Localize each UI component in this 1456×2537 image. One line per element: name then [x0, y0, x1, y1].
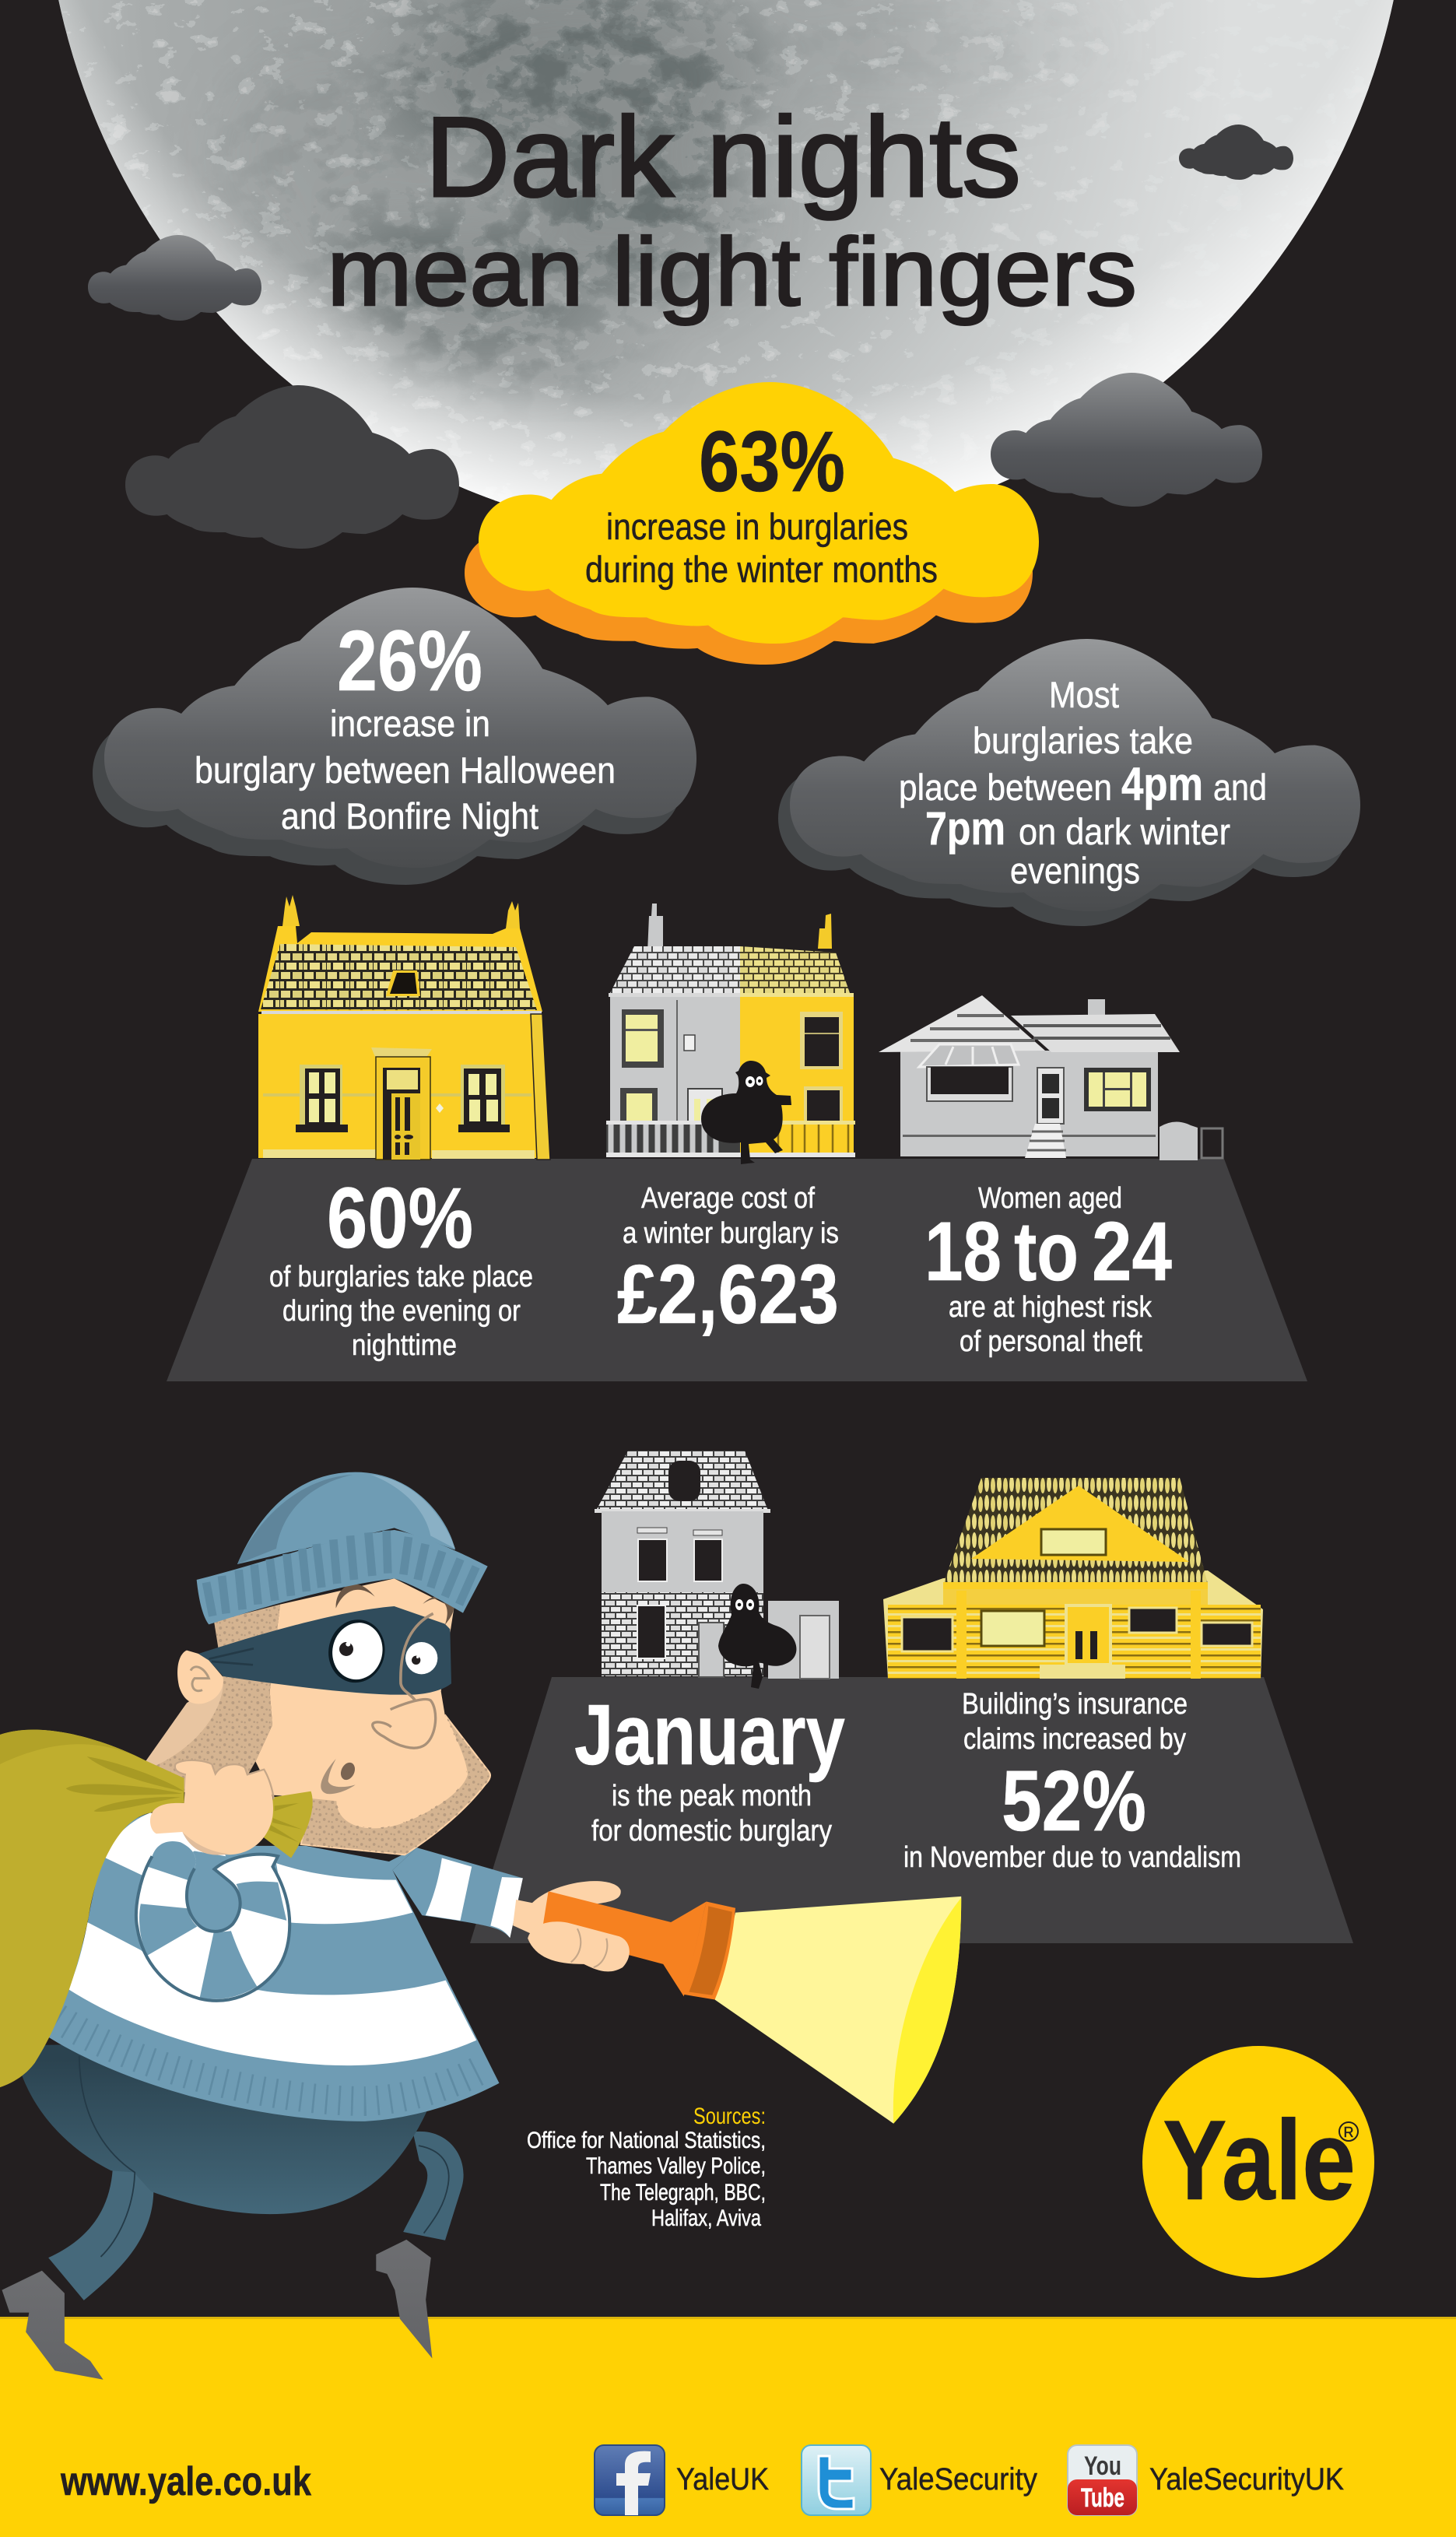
stat: 60%: of burglaries take place	[269, 1261, 533, 1293]
sources	[527, 2104, 766, 2231]
eyebrows	[336, 1584, 454, 1625]
callout: 4pm to 7pm cloud: evenings	[1010, 850, 1140, 891]
cloud: small top right	[1179, 125, 1293, 180]
sources: The Telegraph, BBC,	[600, 2180, 766, 2205]
stat: insurance 52%: Building’s insurance	[962, 1688, 1188, 1721]
burglar illustration	[0, 1472, 961, 2380]
icon: youtube: Tube	[1081, 2483, 1124, 2513]
eyes	[323, 1614, 437, 1688]
silhouette burglar	[718, 1584, 796, 1689]
trousers	[14, 2042, 434, 2214]
sack tie	[262, 1791, 313, 1858]
callout: 26% cloud: and Bonfire Night	[281, 795, 539, 837]
silhouette burglar	[701, 1061, 791, 1164]
callout: 26% cloud: 26%	[337, 613, 482, 709]
front leg	[2, 2154, 153, 2380]
head	[140, 1472, 490, 1855]
stat: women 18 to 24: to	[1014, 1204, 1079, 1298]
callout: 63% yellow cloud	[465, 382, 1039, 665]
house: half grey half yellow	[606, 904, 855, 1164]
torso, sack and jumper	[14, 1812, 523, 2257]
cloud: right grey	[991, 373, 1262, 507]
label: YaleSecurity: YaleSecurity	[879, 2462, 1037, 2497]
window right	[458, 1065, 510, 1132]
hand	[150, 1760, 274, 1855]
house: yellow terrace	[258, 895, 550, 1160]
window left	[296, 1065, 348, 1132]
callout: 4pm to 7pm cloud: and	[1213, 767, 1267, 808]
torch body	[513, 1881, 735, 2000]
back leg	[376, 2132, 464, 2358]
moon	[58, 0, 1394, 503]
callout: 26% cloud: burglary between Halloween	[195, 749, 616, 791]
stat: January	[574, 1687, 845, 1847]
icon: youtube	[1068, 2445, 1137, 2515]
callout: 4pm to 7pm cloud: 7pm	[925, 802, 1005, 854]
jumper	[45, 1812, 499, 2121]
stat: insurance 52%	[903, 1688, 1241, 1874]
house: grey bungalow	[879, 995, 1223, 1160]
stat: cost: £2,623	[617, 1247, 839, 1341]
cloud: small left	[88, 235, 261, 321]
platform 2 with statistics	[470, 1677, 1353, 1943]
stat: 60%	[269, 1170, 533, 1362]
website url: www.yale.co.uk	[60, 2459, 311, 2504]
icon: youtube: You	[1084, 2451, 1121, 2481]
callout: 4pm to 7pm cloud: Most	[1049, 674, 1119, 715]
chin stubble	[301, 1714, 490, 1855]
Yale logo: R	[1343, 2125, 1354, 2140]
stat: 60%: nighttime	[352, 1329, 457, 1362]
sources: Thames Valley Police,	[586, 2153, 766, 2179]
door	[371, 1047, 444, 1160]
stat: cost: a winter burglary is	[623, 1217, 839, 1250]
nose and mouth	[321, 1613, 436, 1794]
title: Dark nights	[425, 93, 1021, 220]
Yale logo: Yale	[1163, 2097, 1356, 2223]
stat: insurance 52%: in November due to vandalism	[903, 1841, 1241, 1874]
stat: cost	[617, 1182, 839, 1341]
sack	[0, 1730, 184, 2087]
title	[327, 93, 1137, 326]
callout: 4pm to 7pm cloud: 4pm	[1121, 758, 1203, 810]
callout: 63% yellow cloud: during the winter months	[585, 549, 938, 590]
ear	[177, 1651, 223, 1704]
callout: 4pm to 7pm cloud: burglaries take	[973, 720, 1193, 761]
stat: women 18 to 24: 18	[924, 1204, 1002, 1298]
house: stone terrace	[595, 1451, 839, 1689]
sleeve	[392, 1847, 523, 1938]
callout: 26% cloud: increase in	[330, 703, 490, 744]
stat: 60%: 60%	[327, 1170, 473, 1266]
stat: women 18 to 24: of personal theft	[960, 1325, 1142, 1358]
mask	[198, 1606, 451, 1695]
label: YaleUK: YaleUK	[676, 2462, 769, 2497]
callout: 63% yellow cloud: increase in burglaries	[606, 506, 908, 547]
stat: women 18 to 24: 24	[1092, 1204, 1172, 1298]
sources: Sources:	[693, 2104, 766, 2129]
sack and hand	[0, 1730, 313, 2087]
stat: January: is the peak month	[612, 1780, 812, 1812]
callout: 4pm to 7pm cloud	[778, 639, 1360, 926]
title: mean light fingers	[327, 219, 1137, 326]
sources: Office for National Statistics,	[527, 2128, 766, 2153]
icon: twitter	[802, 2445, 871, 2515]
stat: insurance 52%: 52%	[1002, 1753, 1146, 1849]
stat: cost: Average cost of	[641, 1182, 815, 1215]
cloud: large dark left	[125, 385, 459, 549]
badge	[136, 1841, 289, 2001]
stat: January: January	[574, 1687, 845, 1783]
legs and shoes	[2, 2132, 464, 2380]
stat: women 18 to 24: Women aged	[978, 1182, 1122, 1215]
stat: 60%: during the evening or	[282, 1295, 521, 1328]
face	[255, 1578, 467, 1827]
platform 1 with statistics	[167, 1159, 1307, 1381]
icon: facebook	[595, 2445, 665, 2515]
torch beam	[715, 1897, 961, 2124]
stat: women 18 to 24	[924, 1182, 1172, 1358]
stat: January: for domestic burglary	[591, 1815, 832, 1847]
Yale logo	[1142, 2046, 1374, 2278]
house: yellow bungalow	[883, 1478, 1263, 1679]
hat	[197, 1472, 488, 1624]
callout: 4pm to 7pm cloud: on dark winter	[1019, 811, 1230, 852]
stat: women 18 to 24: are at highest risk	[949, 1291, 1153, 1324]
stat: insurance 52%: claims increased by	[963, 1723, 1186, 1756]
callout: 63% yellow cloud: 63%	[699, 414, 845, 510]
footer band	[0, 2317, 1456, 2537]
torch and arm	[513, 1881, 961, 2124]
callout: 26% cloud	[93, 588, 696, 885]
sources: Halifax, Aviva	[651, 2205, 761, 2231]
callout: 4pm to 7pm cloud: place between	[899, 767, 1112, 808]
label: YaleSecurityUK: YaleSecurityUK	[1149, 2462, 1344, 2497]
neck and stubble	[140, 1605, 280, 1800]
